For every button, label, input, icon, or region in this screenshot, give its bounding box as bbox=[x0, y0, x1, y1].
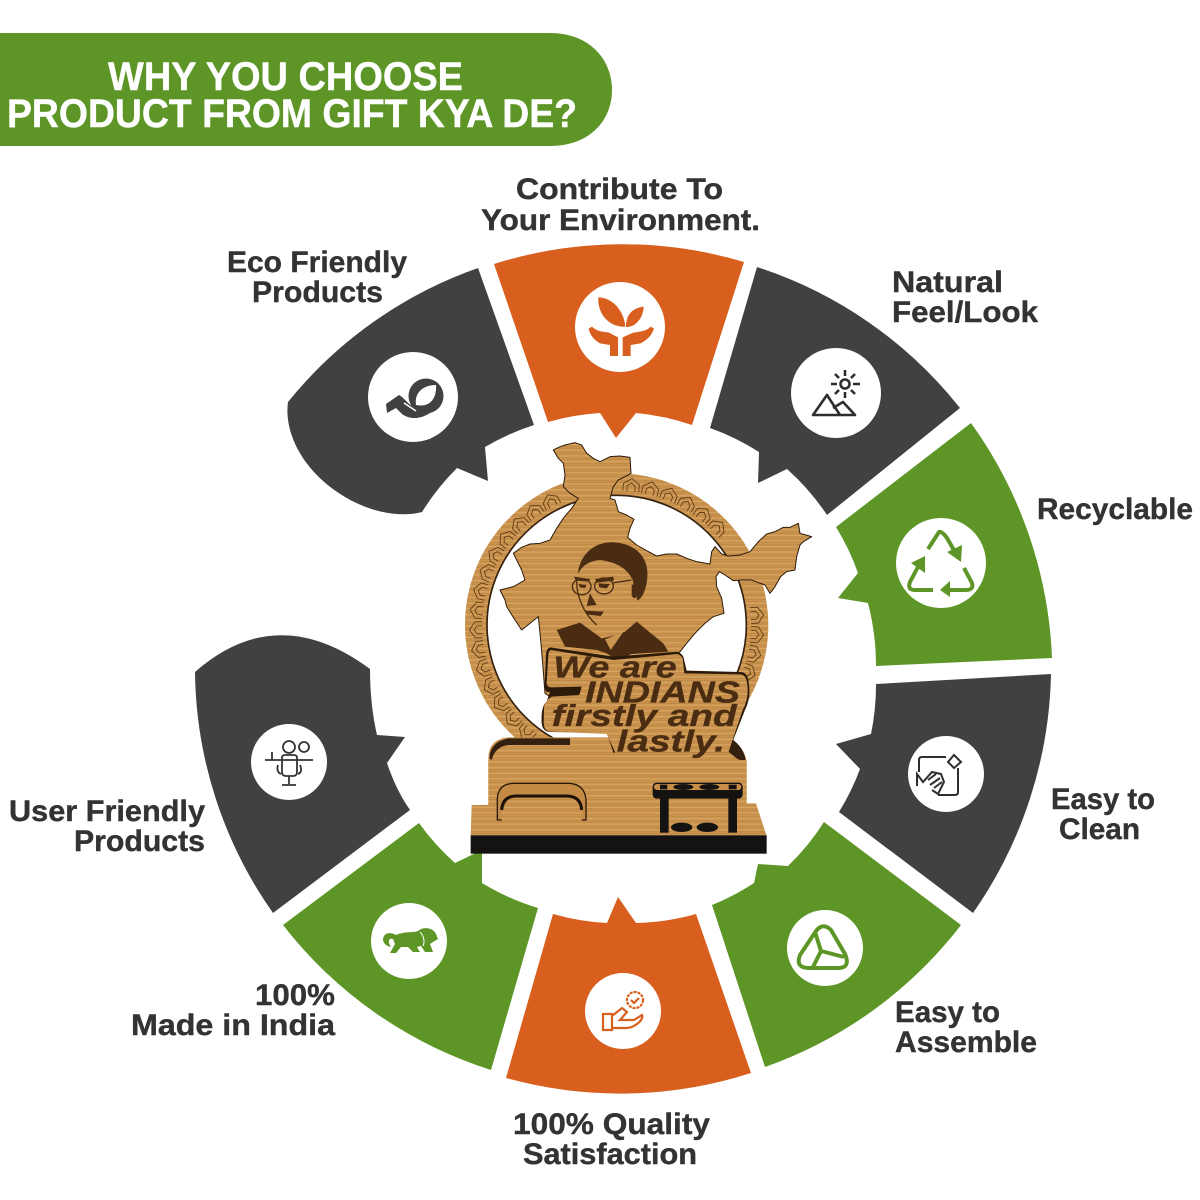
icon: plant in hands bbox=[575, 282, 665, 372]
quote text: We are bbox=[553, 650, 677, 684]
panel: Easy to Clean bbox=[836, 674, 1155, 913]
icon: recycle arrows bbox=[896, 518, 986, 608]
base body bbox=[488, 737, 747, 821]
panel: 100% Made in India bbox=[131, 823, 538, 1070]
quote text bbox=[552, 650, 741, 759]
quote text: firstly and bbox=[552, 699, 738, 733]
decorative ring bbox=[469, 478, 764, 766]
panel: Natural Feel/Look bbox=[710, 266, 1038, 515]
panel: Recyclable bbox=[836, 423, 1193, 666]
header banner bbox=[0, 33, 612, 146]
label: Contribute To bbox=[516, 173, 723, 206]
label: 100% bbox=[255, 979, 335, 1012]
panel: Easy to Assemble bbox=[712, 822, 1037, 1067]
label: Assemble bbox=[895, 1026, 1037, 1059]
quote text: lastly. bbox=[617, 725, 725, 759]
India map bbox=[500, 443, 812, 697]
icon: sun and mountains bbox=[791, 348, 881, 438]
quote text: INDIANS bbox=[585, 676, 741, 710]
quote plate shadow bbox=[542, 647, 749, 753]
panel: 100% Quality Satisfaction bbox=[506, 897, 751, 1171]
label: User Friendly bbox=[9, 795, 205, 828]
quote plate bbox=[544, 650, 748, 753]
label: Natural bbox=[892, 266, 1003, 299]
label: Feel/Look bbox=[892, 296, 1038, 329]
product: wooden India map desk stand bbox=[469, 443, 812, 854]
portrait of Dr. Ambedkar bbox=[557, 542, 668, 660]
label: Clean bbox=[1059, 813, 1140, 846]
icon: hand wiping surface bbox=[908, 736, 984, 812]
icon: person at desk bbox=[251, 724, 327, 800]
icon: assembled triangle bbox=[787, 910, 863, 986]
label: Made in India bbox=[131, 1009, 335, 1042]
base plate bbox=[471, 803, 767, 836]
label: Products bbox=[74, 825, 205, 858]
icon: lion bbox=[371, 903, 447, 979]
icon: hand with leaf bbox=[368, 352, 458, 442]
label: Your Environment. bbox=[481, 204, 760, 237]
card holder bbox=[497, 783, 586, 834]
label: Eco Friendly bbox=[227, 246, 407, 279]
label: Satisfaction bbox=[523, 1138, 697, 1171]
panel: User Friendly Products bbox=[9, 635, 410, 913]
label: Recyclable bbox=[1037, 493, 1193, 526]
banner heading: WHY YOU CHOOSE bbox=[108, 55, 463, 99]
label: Easy to bbox=[1051, 783, 1155, 816]
label: 100% Quality bbox=[513, 1108, 710, 1141]
banner heading: PRODUCT FROM GIFT KYA DE? bbox=[7, 92, 577, 136]
label: Products bbox=[252, 276, 383, 309]
panel: Contribute To Your Environment bbox=[481, 173, 760, 438]
icon: hand with quality badge bbox=[585, 973, 661, 1049]
label: Easy to bbox=[895, 996, 1000, 1029]
panel: Eco Friendly Products bbox=[227, 246, 534, 514]
pen holder bbox=[653, 783, 743, 833]
